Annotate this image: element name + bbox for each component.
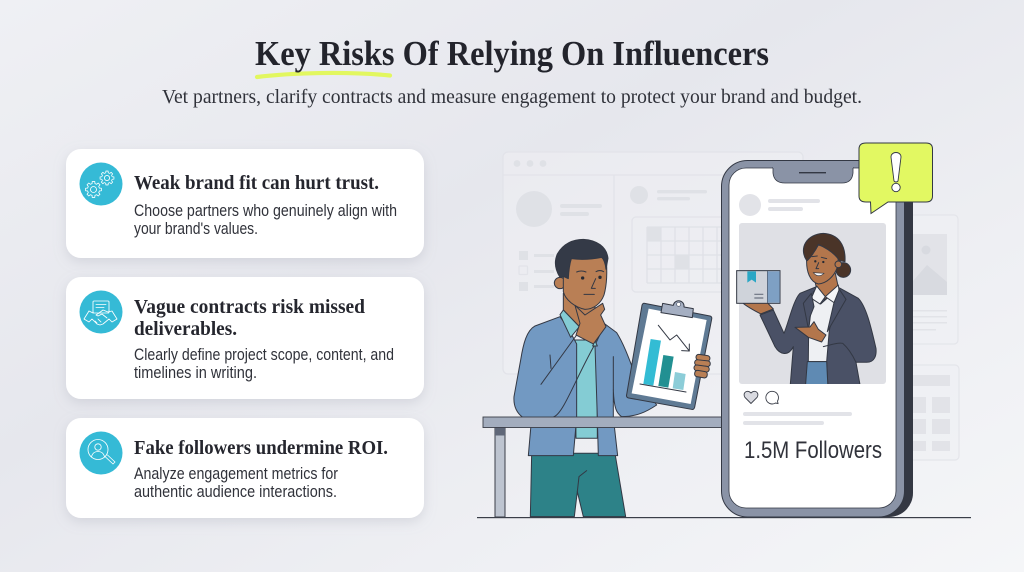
panel: vague contracts <box>66 277 424 399</box>
collar and lapels <box>811 285 839 304</box>
phone notch <box>773 165 853 183</box>
phone <box>722 160 913 517</box>
illustration: woman holding a box <box>737 233 876 388</box>
skirt <box>805 361 828 384</box>
ground line <box>477 517 971 518</box>
desk <box>483 417 723 517</box>
card heading: Weak brand fit can hurt trust. <box>134 172 379 194</box>
illustration: man with clipboard <box>514 239 712 517</box>
jacket <box>514 317 657 456</box>
card body <box>134 465 338 501</box>
presenting hand <box>795 322 826 342</box>
card body: authentic audience interactions. <box>134 483 337 501</box>
card heading: deliverables. <box>134 318 237 340</box>
card body: Choose partners who genuinely align with <box>134 202 397 220</box>
holding hand <box>742 303 773 314</box>
hair bun <box>836 263 851 277</box>
neck and collar <box>560 293 597 346</box>
jacket <box>760 287 876 388</box>
alert speech bubble <box>859 143 932 214</box>
clipboard <box>627 301 712 409</box>
background post wireframes <box>900 215 959 460</box>
title: Key Risks Of Relying On Influencers <box>255 34 769 73</box>
caption lines <box>743 412 852 425</box>
card body <box>134 346 394 382</box>
panel: fake followers <box>66 418 424 518</box>
neck <box>814 272 838 299</box>
card body: Analyze engagement metrics for <box>134 465 338 483</box>
card body: timelines in writing. <box>134 364 257 382</box>
fingers <box>694 354 711 378</box>
subtitle: Vet partners, clarify contracts and measure engagement to protect your brand and budget. <box>162 86 862 108</box>
engagement icons <box>744 391 778 404</box>
shirt <box>575 340 597 438</box>
shipping box <box>737 271 780 303</box>
post photo <box>739 223 886 384</box>
card heading: Fake followers undermine ROI. <box>134 437 388 459</box>
pants <box>530 453 626 517</box>
icon: gears <box>80 162 122 206</box>
card body: your brand's values. <box>134 220 258 238</box>
follower count: 1.5M Followers <box>744 437 882 464</box>
card heading <box>134 296 366 340</box>
panel: weak brand fit <box>66 149 424 258</box>
head <box>554 239 608 309</box>
icon: person under magnifier <box>80 432 122 474</box>
background browser wireframe <box>503 152 803 374</box>
card body <box>134 202 397 238</box>
post header <box>739 194 820 216</box>
head <box>807 245 838 284</box>
icon: handshake and contract <box>80 290 122 334</box>
hand on chin <box>575 303 606 344</box>
card body: Clearly define project scope, content, and <box>134 346 394 364</box>
blouse <box>808 291 834 362</box>
card heading: Vague contracts risk missed <box>134 296 366 318</box>
